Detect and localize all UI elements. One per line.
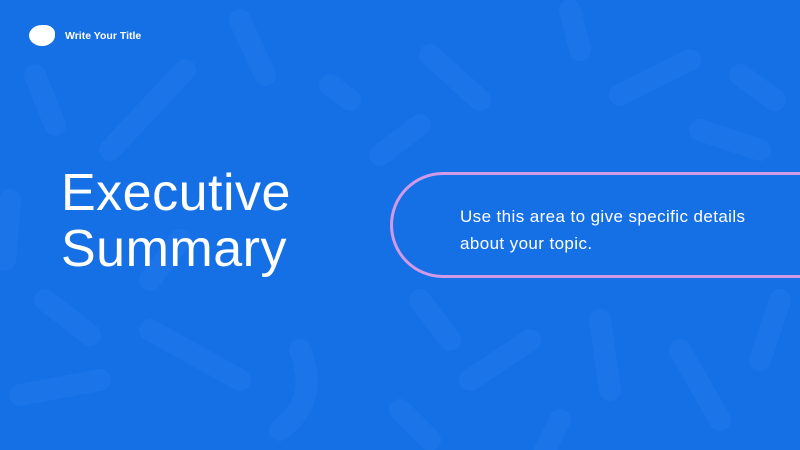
main heading: Summary [61,220,287,278]
main heading [61,164,291,278]
callout text: about your topic. [460,234,592,253]
callout text: Use this area to give specific details [460,207,745,226]
callout text [460,207,745,253]
header title: Write Your Title [65,30,141,42]
main heading: Executive [61,164,291,222]
callout pill [390,172,800,278]
logo icon [29,25,55,46]
